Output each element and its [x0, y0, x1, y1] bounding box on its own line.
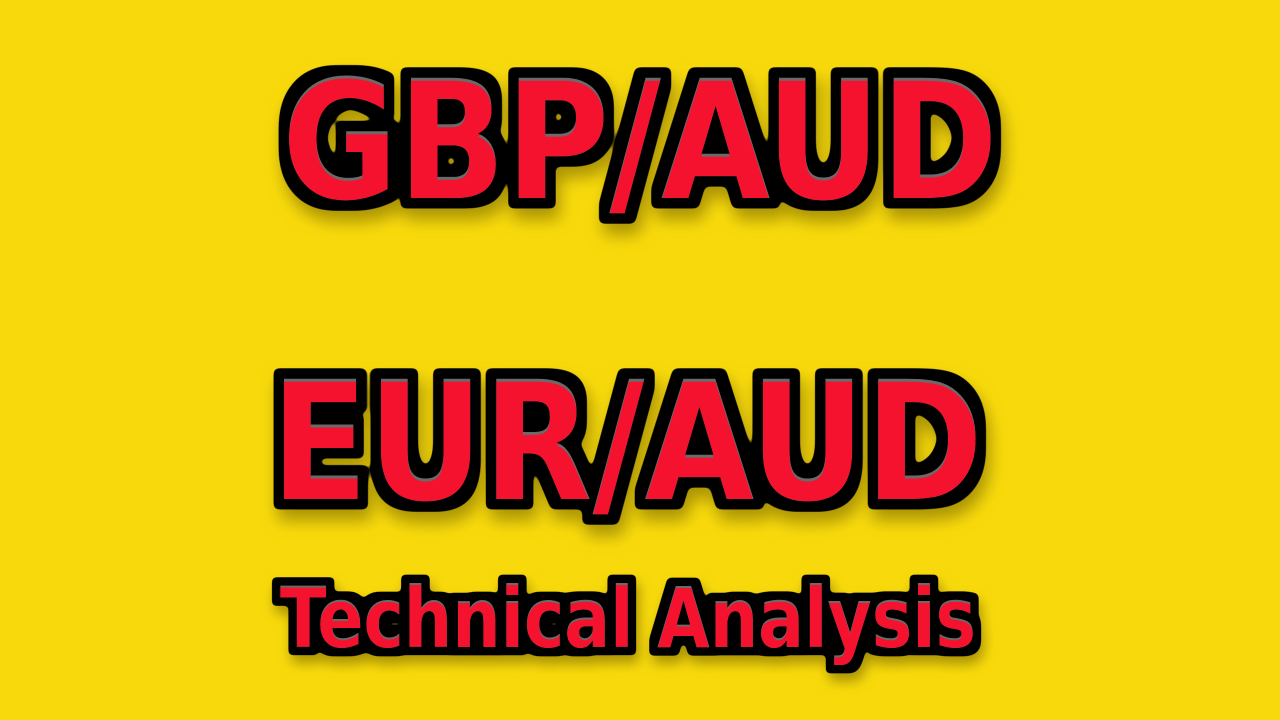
subheading: Technical Analysis: Technical Analysis: [280, 569, 976, 667]
heading: EUR/AUD: EUR/AUD: [271, 346, 983, 538]
heading: GBP/AUD: GBP/AUD: [282, 45, 998, 237]
